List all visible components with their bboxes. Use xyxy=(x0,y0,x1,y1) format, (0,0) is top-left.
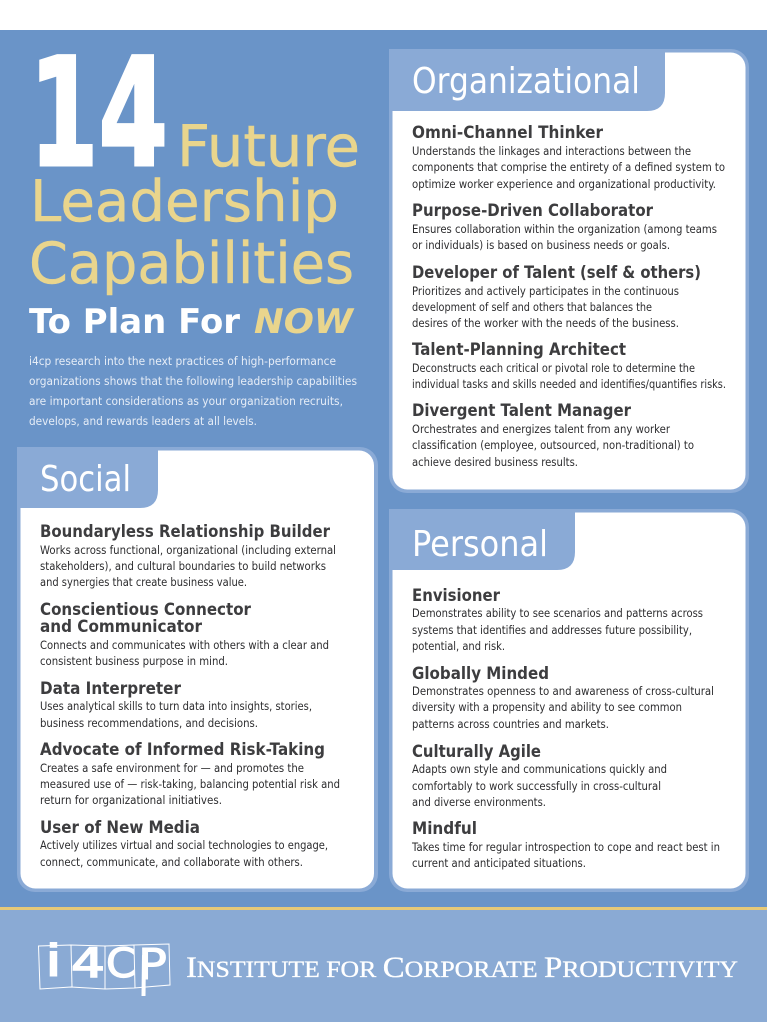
item: divergent talent manager: classification (employee, outsourced, non-traditional) to xyxy=(412,438,694,452)
item: data interpreter: Uses analytical skills to turn data into insights, stories, xyxy=(40,699,312,713)
title: 14 xyxy=(29,27,168,201)
item: divergent talent manager: Orchestrates and energizes talent from any worker xyxy=(412,422,670,436)
intro text: develops, and rewards leaders at all levels. xyxy=(29,414,257,428)
title: NOW xyxy=(254,302,355,342)
item: omni-channel thinker: components that comprise the entirety of a defined system to xyxy=(412,160,725,174)
intro text: i4cp research into the next practices of high-performance xyxy=(29,354,336,368)
item: boundaryless relationship builder: Works across functional, organizational (including external xyxy=(40,543,336,557)
icon: i4cp logo xyxy=(38,934,170,996)
title: Future xyxy=(177,114,360,180)
icon: i4cp logo: 4 xyxy=(71,941,105,987)
panel: organizational xyxy=(389,49,749,493)
item: advocate of informed risk-taking: measured use of — risk-taking, balancing potential risk and xyxy=(40,777,340,791)
item: data interpreter: Data Interpreter xyxy=(40,679,182,699)
title: Capabilities xyxy=(29,231,354,297)
item: globally minded: diversity with a propensity and ability to see common xyxy=(412,700,682,714)
intro text xyxy=(29,354,357,428)
item: omni-channel thinker: Omni-Channel Thinker xyxy=(412,123,604,143)
item: developer of talent: development of self and others that balances the xyxy=(412,300,652,314)
icon: i4cp logo: C xyxy=(106,941,136,987)
item: divergent talent manager: Divergent Talent Manager xyxy=(412,401,632,421)
item: envisioner xyxy=(412,586,703,653)
item: envisioner: Envisioner xyxy=(412,586,501,606)
item: culturally agile: comfortably to work successfully in cross-cultural xyxy=(412,779,661,793)
item: conscientious connector and communicator xyxy=(40,600,329,668)
item: mindful: Mindful xyxy=(412,819,477,839)
tab: social xyxy=(17,447,158,530)
item: omni-channel thinker: Understands the linkages and interactions between the xyxy=(412,144,691,158)
item: user of new media: Actively utilizes virtual and social technologies to engage, xyxy=(40,838,328,852)
item: boundaryless relationship builder: stakeholders), and cultural boundaries to build networks xyxy=(40,559,326,573)
item: purpose-driven collaborator: Ensures collaboration within the organization (among teams xyxy=(412,222,717,236)
tab: personal xyxy=(389,509,575,590)
item: boundaryless relationship builder: and synergies that create business value. xyxy=(40,575,247,589)
intro text: organizations shows that the following leadership capabilities xyxy=(29,374,357,388)
item: culturally agile xyxy=(412,742,667,809)
item: talent-planning architect: Talent-Planning Architect xyxy=(412,340,626,360)
item: talent-planning architect: Deconstructs each critical or pivotal role to determine the xyxy=(412,361,695,375)
item: envisioner: potential, and risk. xyxy=(412,639,505,653)
item: culturally agile: Culturally Agile xyxy=(412,742,541,762)
tab: organizational xyxy=(389,49,665,135)
item: globally minded: patterns across countries and markets. xyxy=(412,717,609,731)
heading: social: Social xyxy=(40,459,131,500)
item: developer of talent: Developer of Talent (self & others) xyxy=(412,263,701,283)
icon: i4cp logo: P xyxy=(138,940,167,990)
item: purpose-driven collaborator: Purpose-Driven Collaborator xyxy=(412,201,654,221)
icon: i4cp logo: i xyxy=(47,934,60,986)
item: envisioner: Demonstrates ability to see scenarios and patterns across xyxy=(412,606,703,620)
item: envisioner: systems that identifies and addresses future possibility, xyxy=(412,623,692,637)
item: data interpreter: business recommendations, and decisions. xyxy=(40,716,258,730)
item: user of new media: User of New Media xyxy=(40,818,200,838)
item: mindful: Takes time for regular introspection to cope and react best in xyxy=(411,840,720,854)
item: advocate of informed risk-taking: Creates a safe environment for — and promotes the xyxy=(40,761,304,775)
item: globally minded xyxy=(412,664,714,731)
panel: social xyxy=(17,447,378,892)
title xyxy=(29,27,360,342)
item: talent-planning architect xyxy=(412,340,726,391)
item: culturally agile: Adapts own style and communications quickly and xyxy=(412,762,667,776)
item: culturally agile: and diverse environments. xyxy=(412,795,546,809)
item: divergent talent manager xyxy=(412,401,694,469)
item: advocate of informed risk-taking: return for organizational initiatives. xyxy=(40,793,222,807)
item: user of new media xyxy=(40,818,328,869)
item: data interpreter xyxy=(40,679,312,730)
panel: personal xyxy=(389,509,749,892)
item: boundaryless relationship builder xyxy=(40,522,336,589)
item: globally minded: Globally Minded xyxy=(412,664,549,684)
footer band xyxy=(0,907,767,1022)
item: mindful: current and anticipated situations. xyxy=(412,856,586,870)
organization name: INSTITUTE FOR CORPORATE PRODUCTIVITY xyxy=(186,951,738,984)
item: purpose-driven collaborator xyxy=(412,201,717,252)
item: developer of talent: Prioritizes and actively participates in the continuous xyxy=(412,284,679,298)
item: developer of talent xyxy=(412,263,701,330)
item: boundaryless relationship builder: Boundaryless Relationship Builder xyxy=(40,522,331,542)
item: globally minded: Demonstrates openness to and awareness of cross-cultural xyxy=(412,684,714,698)
heading: organizational: Organizational xyxy=(412,61,640,102)
title: Leadership xyxy=(30,169,339,235)
heading: personal: Personal xyxy=(412,524,548,565)
item: omni-channel thinker xyxy=(412,123,725,191)
item: advocate of informed risk-taking xyxy=(40,740,340,807)
item: conscientious connector and communicator: Connects and communicates with others with a clear and xyxy=(40,638,329,652)
item: advocate of informed risk-taking: Advocate of Informed Risk-Taking xyxy=(40,740,325,760)
item: developer of talent: desires of the worker with the needs of the business. xyxy=(412,316,679,330)
item: conscientious connector and communicator: Conscientious Connector xyxy=(40,600,252,620)
item: user of new media: connect, communicate, and collaborate with others. xyxy=(40,855,303,869)
title: To Plan For xyxy=(29,302,240,342)
item: divergent talent manager: achieve desired business results. xyxy=(412,455,578,469)
item: conscientious connector and communicator: consistent business purpose in mind. xyxy=(40,654,228,668)
intro text: are important considerations as your organization recruits, xyxy=(29,394,343,408)
item: conscientious connector and communicator: and Communicator xyxy=(40,617,203,637)
item: mindful xyxy=(411,819,720,870)
item: purpose-driven collaborator: or individuals) is based on business needs or goals. xyxy=(412,238,670,252)
item: omni-channel thinker: optimize worker experience and organizational productivity. xyxy=(412,177,716,191)
